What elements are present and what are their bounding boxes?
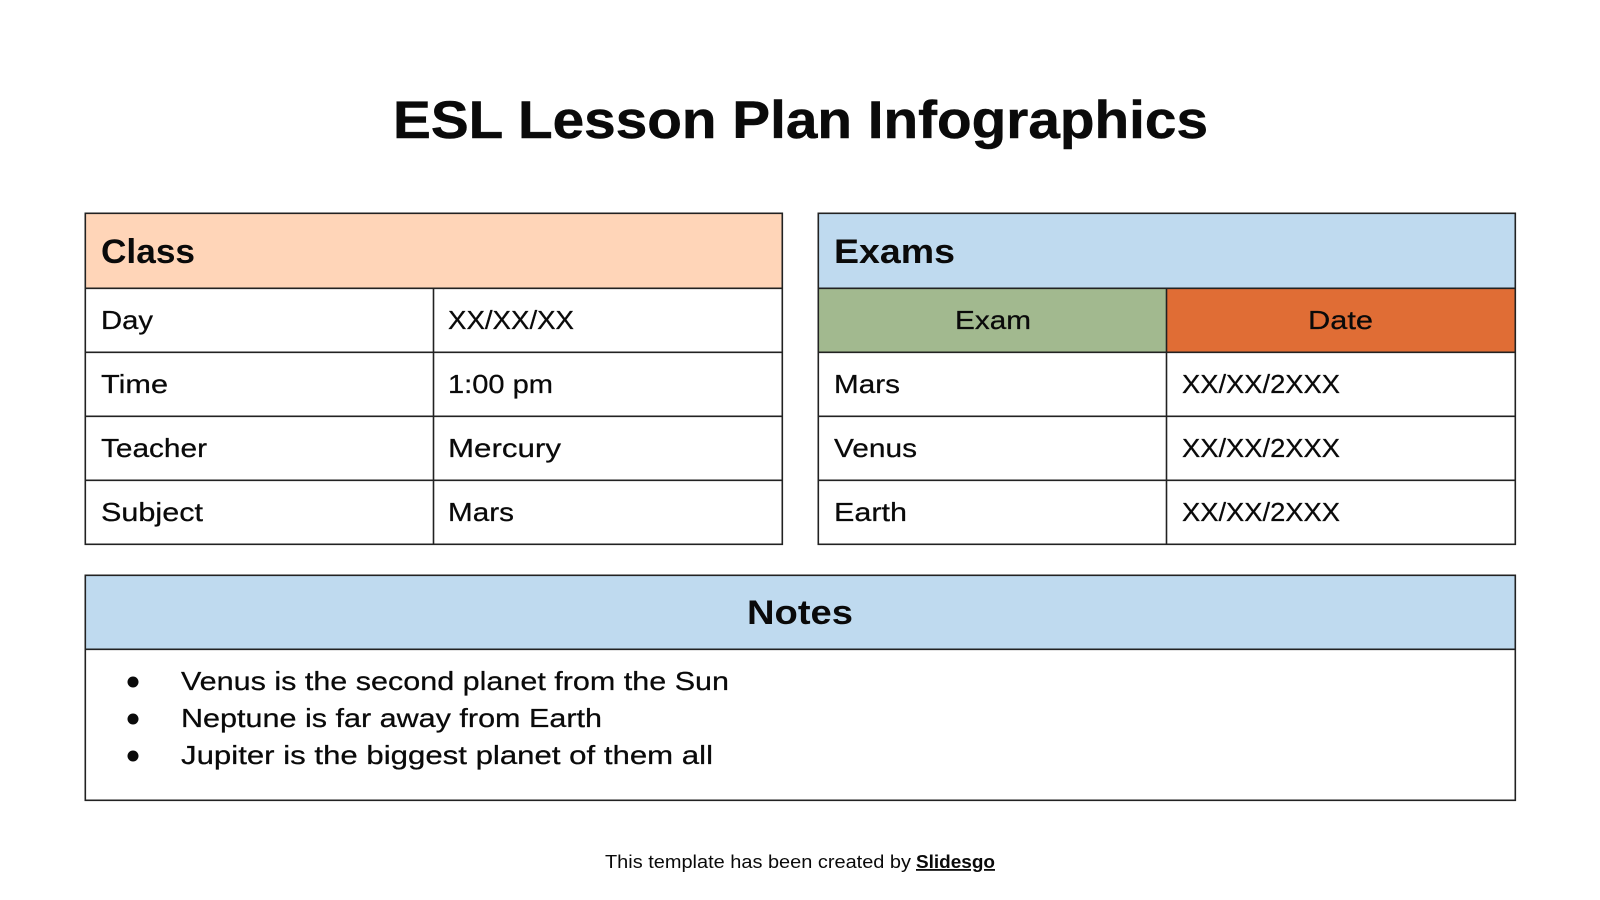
- class rows: Mercury: [448, 433, 561, 463]
- class rows: Day: [101, 305, 153, 335]
- notes list: Neptune is far away from Earth: [181, 703, 602, 733]
- notes list: Jupiter is the biggest planet of them all: [181, 740, 713, 770]
- panel: notes: [85, 575, 1515, 800]
- exam rows: [818, 213, 1515, 544]
- notes header: [85, 575, 1515, 649]
- exam rows: XX/XX/2XXX: [1182, 433, 1340, 463]
- exam rows: Mars: [834, 369, 900, 399]
- panel: class table: [85, 213, 782, 544]
- exam column header: Exam: [955, 305, 1031, 335]
- exam rows: XX/XX/2XXX: [1182, 497, 1340, 527]
- class header: Class: [101, 233, 195, 271]
- exam rows: Earth: [834, 497, 907, 527]
- class rows: Subject: [101, 497, 204, 527]
- panel: exams table: [818, 213, 1515, 544]
- class header: [85, 213, 782, 288]
- footer credit: Slidesgo: [916, 852, 995, 872]
- class rows: 1:00 pm: [448, 369, 553, 399]
- exam column header: [818, 288, 1166, 352]
- exam rows: Venus: [834, 433, 917, 463]
- class rows: Mars: [448, 497, 514, 527]
- footer credit: This template has been created by: [605, 852, 911, 872]
- class rows: Time: [101, 369, 168, 399]
- exam rows: XX/XX/2XXX: [1182, 369, 1340, 399]
- exams header: [818, 213, 1515, 288]
- class rows: Teacher: [101, 433, 207, 463]
- notes header: Notes: [747, 594, 853, 632]
- notes list: [128, 666, 729, 770]
- exams header: Exams: [834, 233, 955, 271]
- class rows: XX/XX/XX: [448, 305, 574, 335]
- date column header: Date: [1308, 305, 1373, 335]
- notes list: Venus is the second planet from the Sun: [181, 666, 729, 696]
- title: ESL Lesson Plan Infographics: [393, 91, 1208, 150]
- class rows: [85, 213, 782, 544]
- date column header: [1166, 288, 1515, 352]
